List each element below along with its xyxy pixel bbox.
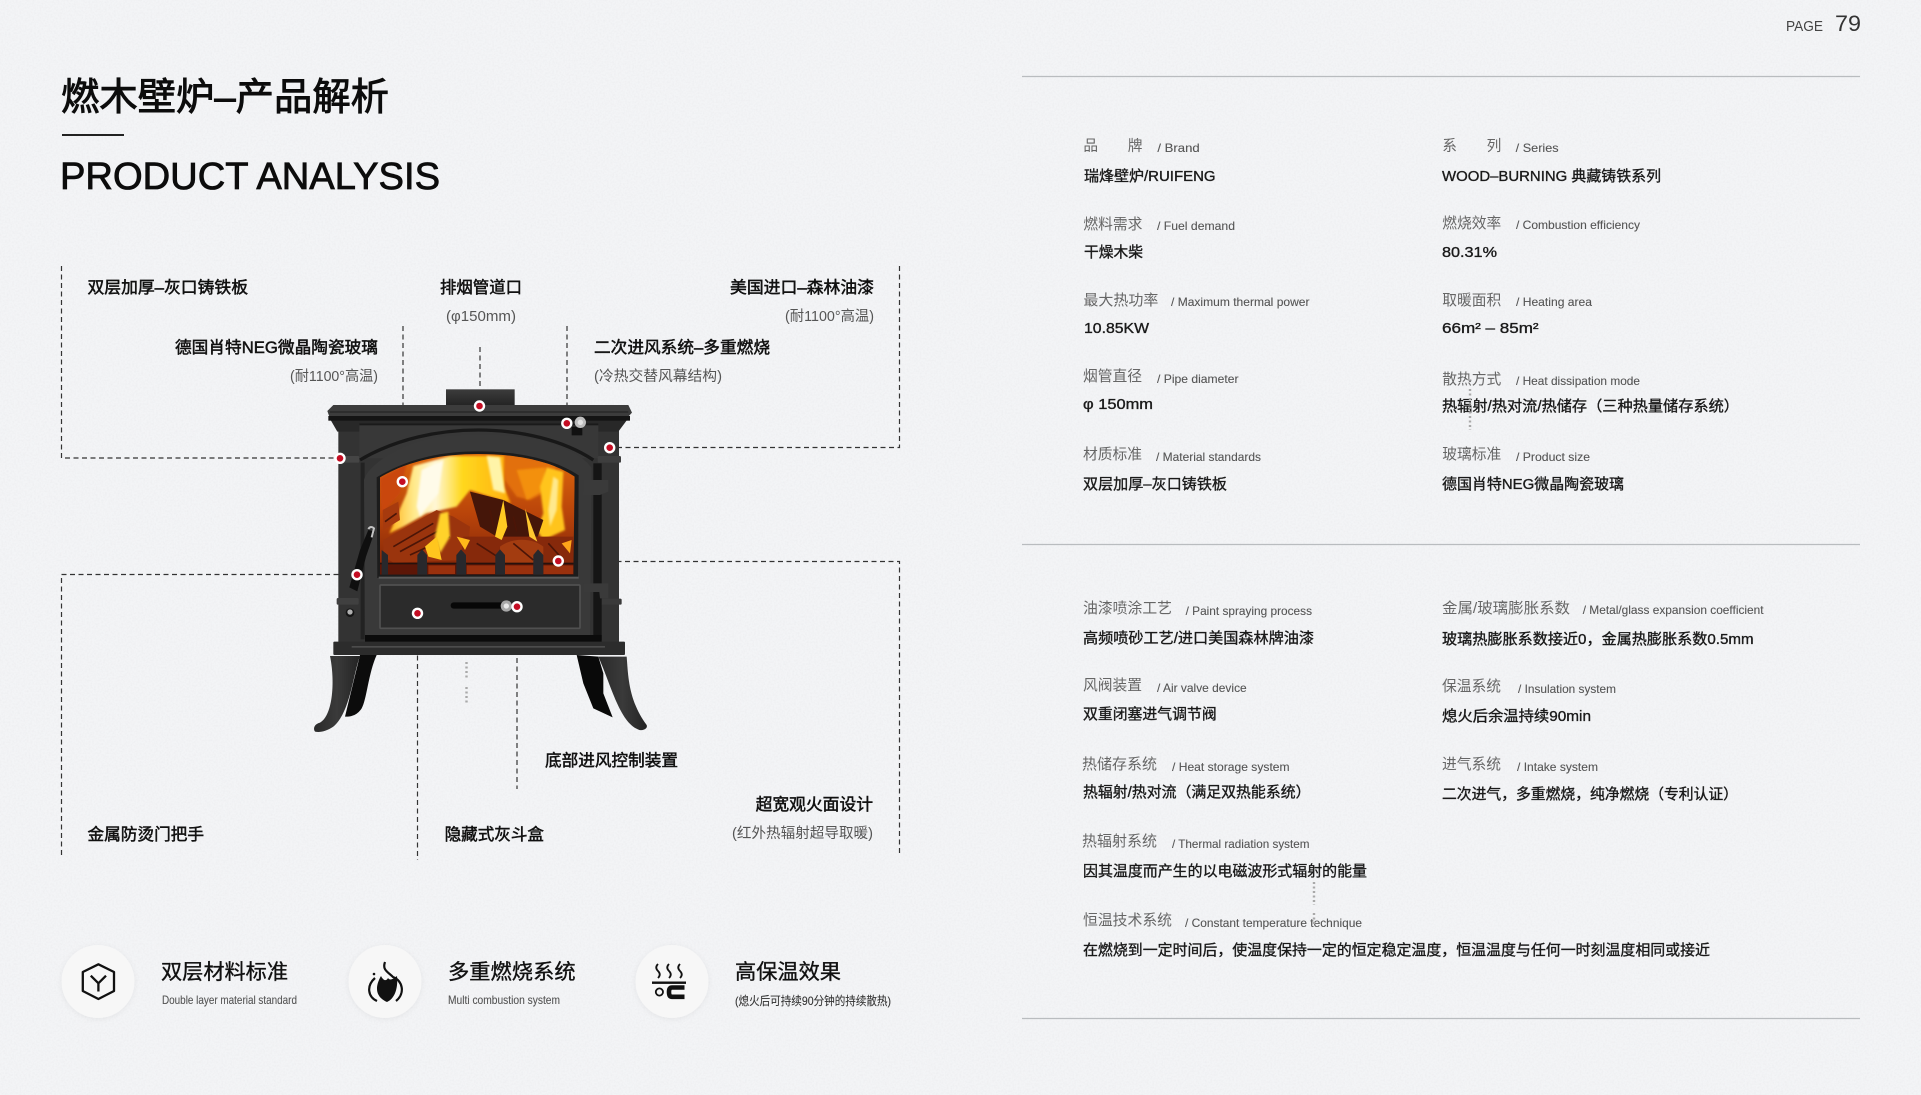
spec: heat dissipation: / Heat dissipation mode [1516, 374, 1640, 388]
callout: ash box: 隐藏式灰斗盒 [445, 825, 545, 844]
spec: max thermal power: / Maximum thermal power [1171, 295, 1310, 309]
callout: ceramic glass: (耐1100°高温) [290, 368, 378, 385]
spec: heat storage: 热储存系统 [1082, 756, 1157, 773]
spec: intake: 进气系统 [1442, 756, 1501, 773]
title: Chinese heading: 燃木壁炉–产品解析 [61, 77, 389, 119]
spec: heat dissipation: 散热方式 [1442, 371, 1502, 388]
spec: material standards: 材质标准 [1083, 446, 1142, 463]
spec: combustion efficiency: 燃烧效率 [1442, 214, 1501, 232]
callout: wide view: (红外热辐射超导取暖) [732, 825, 873, 842]
feature: heat retention [636, 945, 891, 1018]
spec: paint spraying: 油漆喷涂工艺 [1083, 600, 1172, 617]
title block [60, 77, 440, 198]
spec: insulation: / Insulation system [1518, 682, 1616, 696]
spec: max thermal power: 最大热功率 [1083, 292, 1158, 309]
feature caption: (熄火后可持续90分钟的持续散热) [735, 993, 891, 1008]
spec: paint spraying: 高频喷砂工艺/进口美国森林牌油漆 [1083, 630, 1314, 647]
spec: heat storage: 热辐射/热对流（满足双热能系统） [1083, 784, 1310, 801]
spec: pipe diameter: 烟管直径 [1083, 368, 1142, 385]
callout: cast iron plate: 双层加厚–灰口铸铁板 [88, 278, 248, 297]
spec: air valve [1083, 677, 1247, 723]
spec: heating area: 取暖面积 [1442, 292, 1502, 309]
spec: max thermal power [1083, 292, 1310, 337]
spec: fuel demand: 燃料需求 [1083, 215, 1143, 233]
spec: air valve: 风阀装置 [1083, 677, 1142, 694]
spec: thermal radiation: 因其温度而产生的以电磁波形式辐射的能量 [1083, 863, 1367, 880]
spec: constant temperature: 在燃烧到一定时间后，使温度保持一定的恒定稳定温度，恒温温度与任何一时刻温度相同或接近 [1083, 941, 1710, 959]
spec panel: technical systems [1082, 600, 1764, 959]
spec: air valve: / Air valve device [1157, 681, 1247, 695]
spec: brand [1083, 138, 1216, 185]
spec: intake: / Intake system [1517, 760, 1598, 774]
hotspot markers [334, 400, 615, 619]
stove body [327, 405, 632, 655]
spec: brand: / Brand [1157, 141, 1200, 155]
spec: glass standard: 玻璃标准 [1442, 446, 1502, 463]
feature caption: Multi combustion system [448, 993, 560, 1007]
spec: constant temperature: / Constant temperature technique [1185, 916, 1362, 930]
door handle [346, 527, 375, 617]
spec: paint spraying [1083, 600, 1314, 647]
feature heading: 双层材料标准 [161, 961, 288, 984]
left wall [380, 463, 407, 513]
logs [383, 510, 470, 563]
callout: flue outlet [440, 278, 522, 325]
spec: heating area: / Heating area [1516, 295, 1592, 309]
stove legs [314, 655, 647, 732]
callout: flue outlet: (φ150mm) [446, 309, 516, 325]
icon: steam and Celsius [636, 945, 708, 1018]
spec: pipe diameter: φ 150mm [1083, 397, 1153, 413]
fire grate bars [382, 549, 543, 575]
spec: insulation [1442, 678, 1616, 725]
icon: hexagon cube [62, 945, 134, 1018]
spec: glass standard: 德国肖特NEG微晶陶瓷玻璃 [1442, 475, 1624, 493]
spec: combustion efficiency: 80.31% [1442, 245, 1497, 261]
feature caption: Double layer material standard [162, 993, 297, 1007]
spec: fuel demand: 干燥木柴 [1084, 244, 1143, 261]
feature heading: 多重燃烧系统 [448, 961, 576, 984]
callout: ceramic glass [175, 338, 378, 385]
callout: ceramic glass: 德国肖特NEG微晶陶瓷玻璃 [175, 338, 378, 357]
spec: material standards [1083, 446, 1261, 493]
callout: imported paint [730, 278, 874, 325]
callout: wide view [732, 795, 873, 842]
callout: imported paint: (耐1100°高温) [785, 308, 874, 325]
stove flue collar [446, 389, 515, 406]
page number: PAGE [1786, 18, 1823, 35]
feature: double-layer material [62, 945, 297, 1018]
spec: series [1442, 138, 1661, 185]
callout: wide view: 超宽观火面设计 [756, 795, 873, 814]
callout: bottom air control: 底部进风控制装置 [545, 751, 678, 770]
spec: material standards: / Material standards [1156, 450, 1261, 464]
spec: intake [1442, 756, 1738, 803]
spec: heating area: 66m² – 85m² [1442, 321, 1539, 337]
spec: fuel demand [1083, 215, 1235, 261]
ash drawer [380, 585, 580, 628]
page number: 79 [1835, 11, 1861, 36]
stove door [360, 430, 593, 635]
spec: thermal radiation: 热辐射系统 [1082, 833, 1157, 850]
spec panel: basic parameters [1083, 138, 1739, 493]
flame tongues [435, 512, 450, 553]
spec: glass standard [1442, 446, 1624, 493]
spec: paint spraying: / Paint spraying process [1186, 604, 1312, 618]
spec: expansion coefficient [1442, 600, 1764, 648]
right flame [537, 467, 565, 540]
callout: secondary air: (冷热交替风幕结构) [594, 367, 722, 385]
spec: brand: 瑞烽壁炉/RUIFENG [1084, 168, 1216, 185]
ember bed [380, 564, 577, 575]
spec: insulation: 保温系统 [1442, 678, 1501, 695]
spec: heating area [1442, 292, 1592, 337]
spec: brand: 品 牌 [1083, 138, 1143, 154]
spec: fuel demand: / Fuel demand [1157, 219, 1235, 233]
spec: material standards: 双层加厚–灰口铸铁板 [1083, 475, 1227, 493]
watermark dots [466, 389, 1470, 925]
spec: pipe diameter [1083, 368, 1238, 413]
product image: wood-burning stove [314, 389, 647, 732]
feature: multi combustion [348, 945, 576, 1018]
spec: heat dissipation: 热辐射/热对流/热储存（三种热量储存系统） [1442, 398, 1739, 415]
spec: combustion efficiency [1442, 214, 1640, 261]
callout: door handle: 金属防烫门把手 [88, 825, 204, 844]
icon: flame [348, 945, 422, 1018]
spec: expansion coefficient: 玻璃热膨胀系数接近0，金属热膨胀系数0.5mm [1442, 631, 1754, 648]
title: English heading: PRODUCT ANALYSIS [60, 156, 440, 198]
main flame band [389, 456, 511, 533]
spec: heat dissipation [1442, 371, 1739, 415]
spec: max thermal power: 10.85KW [1084, 321, 1149, 337]
title rule [62, 134, 124, 136]
fire in glass window [378, 452, 578, 577]
spec: intake: 二次进气，多重燃烧，纯净燃烧（专利认证） [1442, 785, 1738, 803]
spec: series: / Series [1516, 141, 1559, 155]
spec: insulation: 熄火后余温持续90min [1442, 707, 1591, 725]
callout: imported paint: 美国进口–森林油漆 [730, 278, 874, 297]
door hinges [583, 480, 608, 598]
top air knob [572, 417, 586, 435]
upper-right glow [503, 455, 557, 500]
spec: constant temperature: 恒温技术系统 [1083, 912, 1172, 929]
callout: secondary air [594, 338, 770, 385]
page number [1786, 11, 1861, 36]
feature heading: 高保温效果 [735, 961, 841, 984]
spec: series: WOOD–BURNING 典藏铸铁系列 [1442, 168, 1661, 185]
spec: heat storage [1082, 756, 1310, 801]
spec: constant temperature [1083, 912, 1710, 959]
spec: pipe diameter: / Pipe diameter [1157, 372, 1238, 386]
spec: expansion coefficient: 金属/玻璃膨胀系数 [1442, 600, 1570, 617]
spec: expansion coefficient: / Metal/glass expansion coefficient [1583, 603, 1764, 617]
spec: combustion efficiency: / Combustion efficiency [1516, 218, 1640, 232]
leader lines [62, 266, 900, 860]
spec: thermal radiation: / Thermal radiation system [1172, 837, 1310, 851]
spec: air valve: 双重闭塞进气调节阀 [1083, 705, 1217, 723]
log striations [385, 510, 563, 560]
spec dividers [1022, 76, 1860, 1018]
callout: secondary air: 二次进风系统–多重燃烧 [594, 338, 770, 357]
spec: heat storage: / Heat storage system [1172, 760, 1290, 774]
spec: thermal radiation [1082, 833, 1367, 880]
spec: series: 系 列 [1442, 138, 1501, 154]
spec: glass standard: / Product size [1516, 450, 1590, 464]
callout: flue outlet: 排烟管道口 [440, 278, 522, 297]
